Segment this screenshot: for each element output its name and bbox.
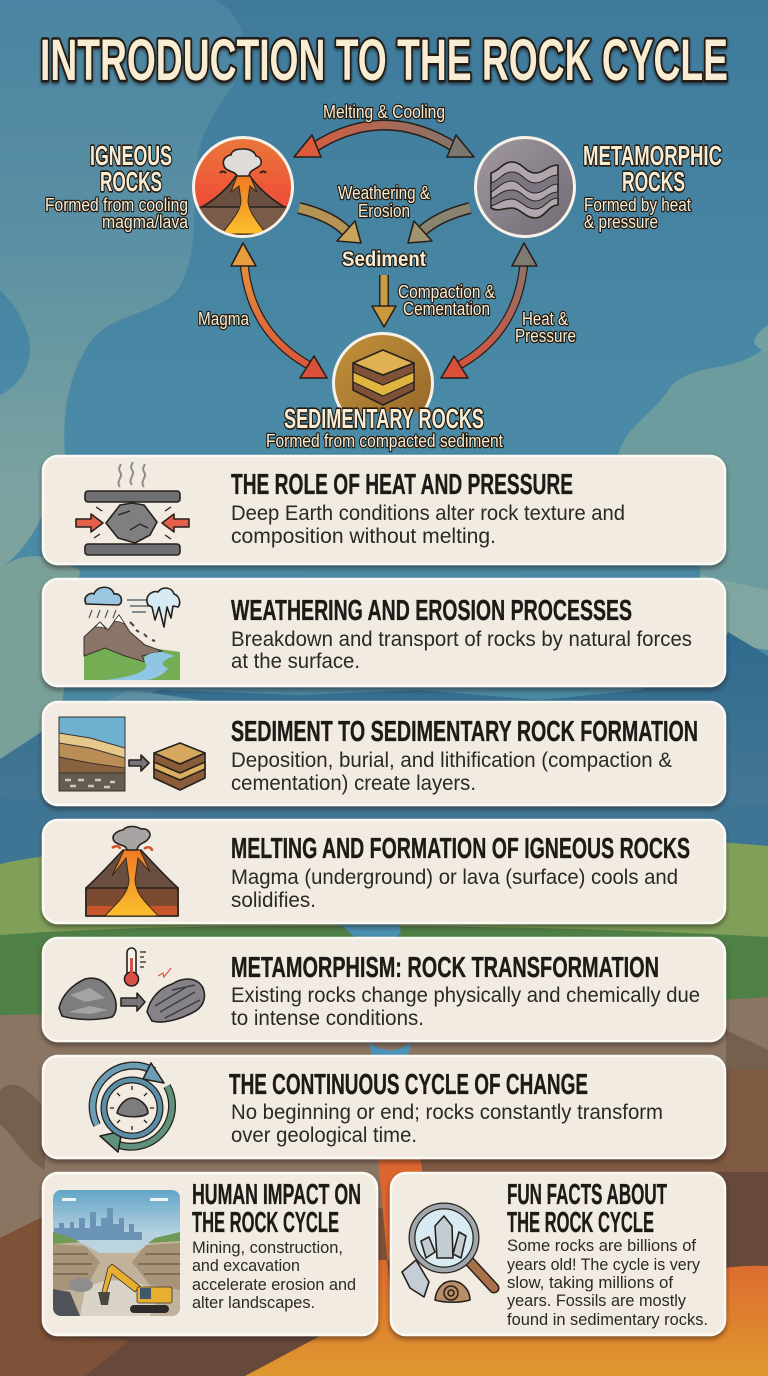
text block: found in sedimentary rocks. bbox=[507, 1310, 708, 1329]
panel: sediment to sedimentary rock bbox=[43, 702, 725, 805]
icon: sediment layers to rock bbox=[59, 717, 205, 791]
label: heat and pressure: Pressure bbox=[515, 326, 576, 346]
label: metamorphic rocks: ROCKS bbox=[622, 166, 685, 197]
text block bbox=[231, 749, 672, 795]
label: compaction and cementation: Cementation bbox=[403, 299, 490, 319]
label: metamorphic rocks bbox=[583, 140, 722, 232]
label: heat and pressure: Heat & bbox=[522, 309, 568, 329]
panel: human impact bbox=[43, 1173, 377, 1335]
sedimentary rock circle bbox=[332, 332, 434, 412]
label: sedimentary rocks: Formed from compacted sediment bbox=[266, 431, 503, 451]
text block: composition without melting. bbox=[231, 525, 496, 548]
label: igneous rocks bbox=[45, 140, 189, 232]
text block: at the surface. bbox=[231, 650, 360, 673]
label: igneous rocks: IGNEOUS bbox=[90, 140, 172, 171]
text block: Mining, construction, bbox=[192, 1238, 343, 1257]
heading bbox=[507, 1179, 667, 1239]
text block bbox=[192, 1238, 356, 1312]
text block: years old! The cycle is very bbox=[507, 1255, 700, 1274]
icon: weathering landscape bbox=[84, 587, 180, 680]
text block: No beginning or end; rocks constantly transform bbox=[231, 1101, 663, 1124]
arrow: sediment compaction down bbox=[372, 275, 396, 327]
panel: fun facts bbox=[391, 1173, 725, 1335]
panel: metamorphism bbox=[43, 938, 725, 1041]
text block: to intense conditions. bbox=[231, 1007, 424, 1030]
text block: Deposition, burial, and lithification (compaction & bbox=[231, 749, 672, 772]
arrow: igneous weathering to sediment bbox=[299, 208, 361, 243]
heading bbox=[192, 1179, 361, 1239]
text block: accelerate erosion and bbox=[192, 1275, 356, 1294]
panel: melting and igneous rocks bbox=[43, 820, 725, 923]
arrow: metamorphic weathering to sediment bbox=[408, 208, 470, 243]
label: metamorphic rocks: Formed by heat bbox=[584, 195, 691, 215]
text block: Existing rocks change physically and chemically due bbox=[231, 984, 700, 1007]
metamorphic rock circle bbox=[476, 138, 574, 236]
text block: Breakdown and transport of rocks by natural forces bbox=[231, 628, 692, 651]
heading: THE ROCK CYCLE bbox=[507, 1207, 654, 1239]
heading: THE ROCK CYCLE bbox=[192, 1207, 339, 1239]
heading: THE CONTINUOUS CYCLE OF CHANGE bbox=[229, 1069, 588, 1101]
text block bbox=[507, 1236, 708, 1329]
label: weathering and erosion: Erosion bbox=[358, 201, 410, 221]
label: sedimentary rocks: SEDIMENTARY ROCKS bbox=[284, 403, 484, 434]
text block: Deep Earth conditions alter rock texture and bbox=[231, 502, 625, 525]
text block: years. Fossils are mostly bbox=[507, 1291, 686, 1310]
icon: rock under pressure bbox=[76, 462, 189, 555]
icon: volcano cross-section bbox=[86, 826, 178, 916]
icon: mining scene with excavator bbox=[53, 1190, 180, 1316]
text block: and excavation bbox=[192, 1256, 300, 1275]
icon: rock transformation bbox=[59, 948, 205, 1022]
text block: alter landscapes. bbox=[192, 1293, 315, 1312]
text block bbox=[231, 1101, 663, 1147]
icon: cycle clock bbox=[93, 1063, 172, 1152]
heading: THE ROLE OF HEAT AND PRESSURE bbox=[231, 469, 573, 501]
arrow: magma bbox=[231, 243, 327, 378]
text block: slow, taking millions of bbox=[507, 1273, 673, 1292]
text block: cementation) create layers. bbox=[231, 772, 476, 795]
arrow: heat and pressure bbox=[441, 243, 537, 378]
label: weathering and erosion bbox=[338, 183, 430, 221]
text block bbox=[231, 984, 700, 1030]
panel: weathering and erosion bbox=[43, 579, 725, 686]
text block: solidifies. bbox=[231, 889, 316, 912]
label: compaction and cementation: Compaction & bbox=[398, 282, 495, 302]
label: heat and pressure bbox=[515, 309, 576, 346]
text block bbox=[231, 628, 692, 673]
rock cycle diagram bbox=[45, 102, 722, 451]
label: weathering and erosion: Weathering & bbox=[338, 183, 430, 203]
label: magma: Magma bbox=[198, 309, 250, 329]
label: igneous rocks: Formed from cooling bbox=[45, 195, 188, 215]
text block: over geological time. bbox=[231, 1124, 417, 1147]
label: metamorphic rocks: & pressure bbox=[584, 212, 658, 232]
panel: continuous cycle bbox=[43, 1056, 725, 1158]
heading: HUMAN IMPACT ON bbox=[192, 1179, 361, 1211]
arrow: melting and cooling between igneous and metamorphic bbox=[294, 125, 474, 157]
icon: magnifier with crystal and fossil bbox=[402, 1206, 494, 1302]
label: melting and cooling: Melting & Cooling bbox=[323, 102, 445, 122]
label: sediment: Sediment bbox=[342, 248, 426, 271]
panel: role of heat and pressure bbox=[43, 456, 725, 564]
text block: Magma (underground) or lava (surface) cools and bbox=[231, 866, 678, 889]
label: compaction and cementation bbox=[398, 282, 495, 319]
label: igneous rocks: magma/lava bbox=[102, 212, 189, 232]
label: igneous rocks: ROCKS bbox=[100, 166, 162, 197]
igneous rock circle bbox=[194, 138, 292, 240]
text block bbox=[231, 866, 678, 912]
text block bbox=[231, 502, 625, 548]
label: sedimentary rocks bbox=[266, 403, 503, 451]
text block: Some rocks are billions of bbox=[507, 1236, 696, 1255]
